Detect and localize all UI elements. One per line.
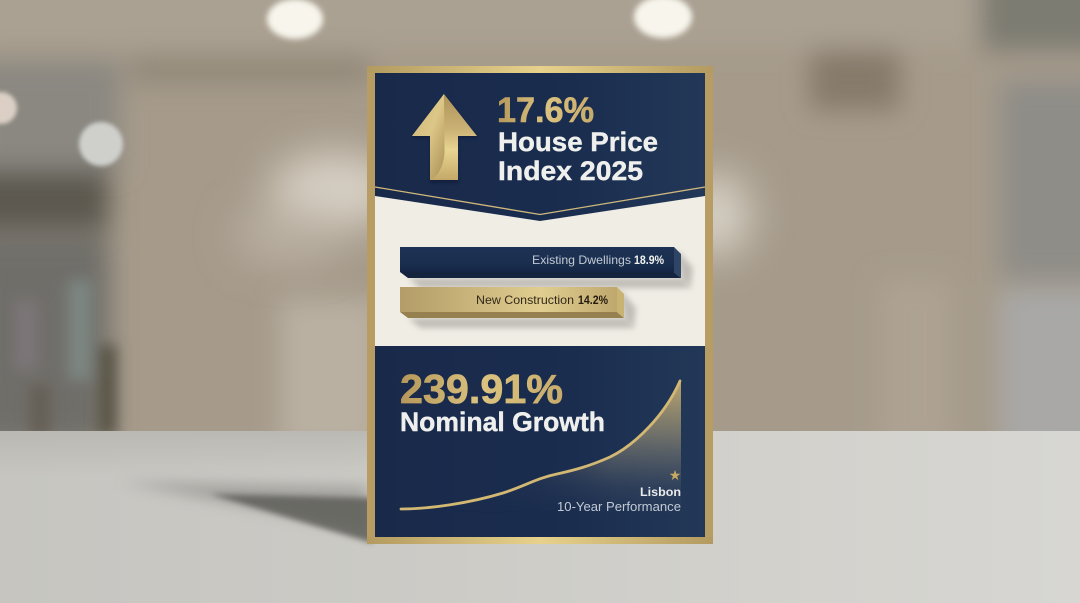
gold card frame <box>367 66 713 544</box>
header gold chevron line <box>375 187 705 214</box>
period label: 10-Year Performance <box>557 499 681 514</box>
location label: Lisbon <box>640 485 681 499</box>
label: 14.2% <box>578 293 608 307</box>
icon: gold up arrow <box>412 94 477 183</box>
headline title: Index 2025 <box>498 156 643 186</box>
label: New Construction <box>476 293 574 307</box>
headline value: 17.6% <box>497 91 594 130</box>
label: Existing Dwellings <box>532 253 631 267</box>
bar: existing dwellings <box>400 247 693 288</box>
bar: new construction <box>400 287 636 328</box>
panel: cream middle <box>375 180 705 350</box>
panel: nominal growth <box>375 346 705 537</box>
headline title <box>498 127 658 186</box>
headline title: House Price <box>498 127 658 157</box>
card shadow on table <box>120 482 372 543</box>
ceiling and wall lights <box>0 0 692 166</box>
growth title: Nominal Growth <box>400 407 605 437</box>
icon: star: ★ <box>669 468 681 484</box>
label: 18.9% <box>634 253 664 267</box>
growth value: 239.91% <box>400 366 563 412</box>
table surface <box>0 431 1080 603</box>
growth curve chart <box>400 379 681 515</box>
panel: header <box>375 73 705 221</box>
